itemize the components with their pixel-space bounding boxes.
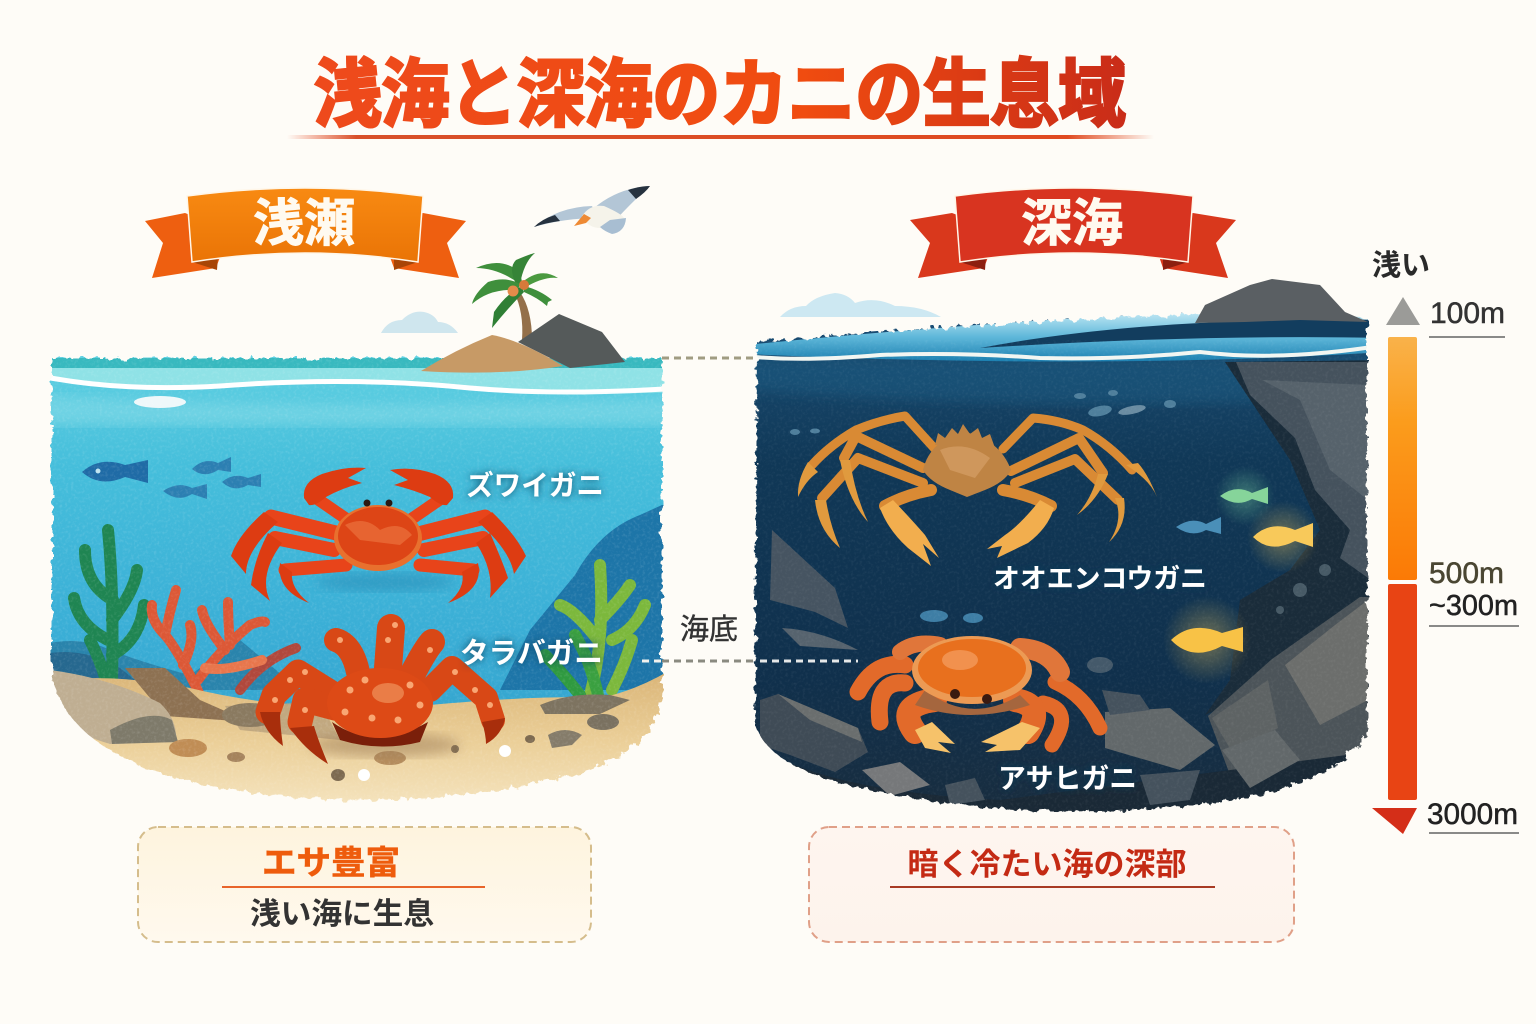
- left seabed rocks: [760, 530, 868, 772]
- icon: palm tree: [472, 253, 558, 340]
- island rock: [518, 314, 625, 368]
- rocks and pebbles on sand: [50, 668, 630, 781]
- title: 浅海と深海のカニの生息域: [314, 53, 1126, 136]
- drifting particles: [790, 390, 1176, 673]
- arrow: top: [1386, 297, 1420, 325]
- seaweed left: [74, 530, 144, 680]
- banner: 浅瀬: [145, 188, 466, 278]
- dark band beside wall: [1205, 360, 1385, 715]
- fish: glowing group: [1163, 466, 1319, 684]
- label: ズワイガニ: ズワイガニ: [466, 469, 604, 501]
- coral: [152, 590, 296, 695]
- connector: sea floor: [642, 660, 858, 662]
- crab: ズワイガニ: [231, 468, 526, 603]
- right rock wall: [1208, 362, 1385, 775]
- info box: 浅瀬: 浅い海に生息: [250, 898, 434, 931]
- icon: seagull: [534, 186, 650, 234]
- banner: 深海: 深海: [1021, 195, 1123, 252]
- crab: アサヒガニ: [858, 636, 1100, 753]
- banner: 浅瀬: 浅瀬: [253, 195, 355, 252]
- ~300m: ~300m: [1429, 590, 1518, 622]
- arrow: bottom: [1372, 808, 1417, 834]
- depth bar: deep: [1388, 584, 1417, 800]
- coastal rock: [1195, 279, 1368, 323]
- panel: deep sea: [753, 312, 1370, 813]
- depth bar: shallow: [1388, 337, 1417, 580]
- info box: 浅瀬: エサ豊富: [262, 844, 400, 881]
- island mound: [421, 335, 563, 373]
- banner: 深海: [910, 188, 1236, 278]
- panel: shallow sea: [40, 350, 680, 820]
- depth scale heading: 浅い: [1372, 249, 1430, 282]
- 500m: 500m: [1429, 557, 1504, 590]
- fish group: [82, 457, 261, 499]
- label: 海底: 海底: [680, 613, 738, 646]
- bottom seabed rocks: [792, 690, 1348, 812]
- icon: cloud left: [381, 312, 458, 333]
- label: タラバガニ: タラバガニ: [460, 637, 603, 670]
- depth scale: [1372, 249, 1519, 834]
- info box: 深海: [809, 827, 1294, 942]
- crab: オオエンコウガニ: [798, 416, 1157, 566]
- 100m: 100m: [1430, 297, 1505, 330]
- 3000m: 3000m: [1427, 798, 1518, 831]
- sand floor: [92, 674, 664, 803]
- seabed hills: [40, 505, 680, 700]
- info box: 浅瀬: [138, 827, 591, 942]
- info box: 深海: 暗く冷たい海の深部: [908, 847, 1186, 882]
- label: アサヒガニ: アサヒガニ: [998, 763, 1137, 794]
- seaweed right: [545, 565, 645, 695]
- connector: sea surface: [662, 356, 755, 360]
- icon: cloud right: [780, 293, 941, 317]
- label: オオエンコウガニ: オオエンコウガニ: [993, 564, 1207, 594]
- crab: タラバガニ: [260, 622, 505, 764]
- deep water surface: [745, 312, 1385, 362]
